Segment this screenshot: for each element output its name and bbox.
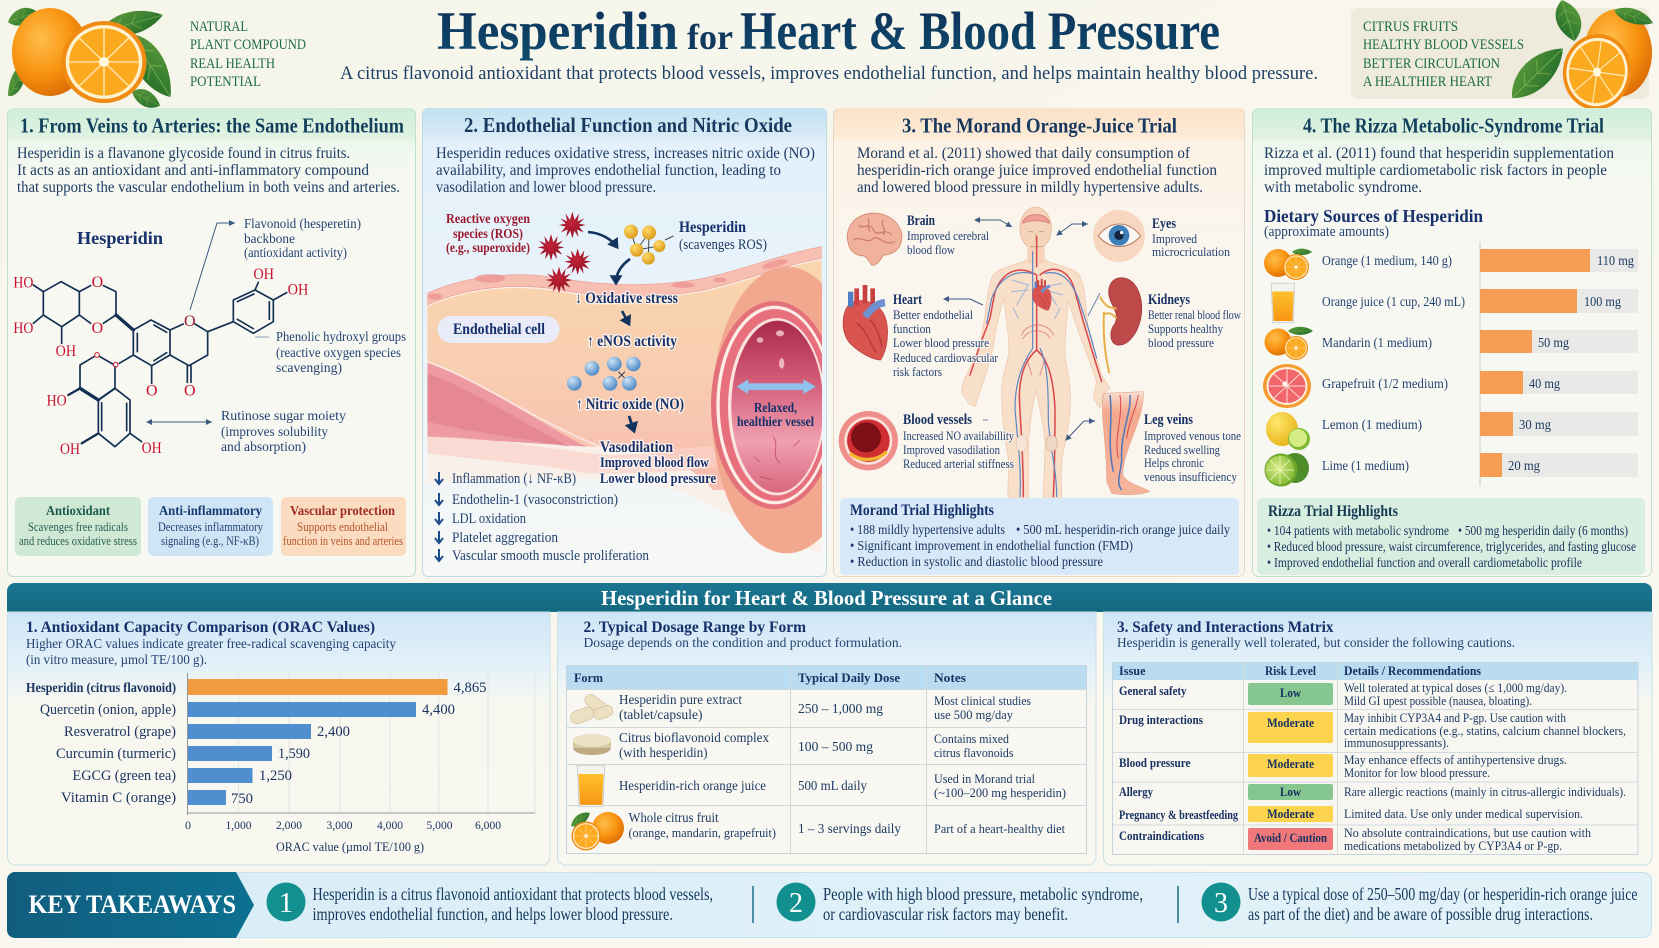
right banner words: [1363, 19, 1524, 90]
label: reactive oxygen species: (e.g., superoxide): [446, 240, 530, 255]
row: bioflavonoid complex: (with hesperidin): [619, 745, 708, 760]
callout: kidneys: [1088, 292, 1241, 350]
panel 3 intro text: [857, 145, 1217, 196]
badge: antioxidant: and reduces oxidative stress: [19, 533, 137, 548]
illustration: human body with circulatory system: [962, 207, 1110, 498]
Morand trial highlights: • 500 mL hesperidin-rich orange juice daily: [1016, 522, 1230, 537]
Morand trial highlights: • Significant improvement in endothelial function (FMD): [850, 538, 1133, 553]
flow label: nitric oxide: ↑ Nitric oxide (NO): [576, 396, 684, 413]
takeaway 1: improves endothelial function, and helps lower blood pressure.: [312, 904, 673, 924]
callout: eyes: Improved: [1152, 231, 1197, 246]
endothelial cell pill: Endothelial cell: [453, 321, 546, 338]
panel 1 intro text: [8, 140, 415, 200]
panel 3: Morand orange-juice trial: [834, 108, 1244, 576]
badge: anti-inflammatory: Anti-inflammatory: [159, 504, 262, 519]
callout: eyes: Eyes: [1152, 216, 1176, 232]
bar chart: ORAC values: [26, 673, 535, 854]
bar chart: ORAC values: 1,590: [278, 746, 310, 762]
table: dosage by form: Typical Daily Dose: [798, 670, 900, 685]
illustration: blood vessel wall: [427, 247, 862, 553]
safety heading: Hesperidin is generally well tolerated, but consider the following cautions.: [1117, 636, 1515, 651]
row: mandarin: Mandarin (1 medium): [1322, 336, 1432, 351]
chemical structure of hesperidin: O: [184, 313, 196, 330]
label: relaxed healthier vessel: Relaxed,: [754, 400, 797, 415]
icon: heart: [843, 285, 888, 360]
label: reactive oxygen species: Reactive oxygen: [446, 211, 530, 226]
dosage heading: 2. Typical Dosage Range by Form: [584, 619, 807, 636]
flow label: oxidative stress: ↓ Oxidative stress: [575, 290, 678, 307]
row: general safety: Well tolerated at typical doses (≤ 1,000 mg/day).: [1344, 681, 1567, 695]
Rizza trial highlights: Rizza Trial Highlights: [1268, 503, 1398, 520]
label: hesperidin scavenges ROS: (scavenges ROS): [679, 237, 767, 253]
title: [437, 1, 1220, 61]
row: contraindications: Avoid / Caution: [1254, 830, 1328, 845]
panel 2: endothelial function and nitric oxide: [422, 108, 862, 576]
flow label: vasodilation outcomes: Improved blood flow: [600, 455, 709, 471]
row: drug interactions: immunosuppressants).: [1344, 736, 1449, 750]
panel 2 intro text: Hesperidin reduces oxidative stress, increases nitric oxide (NO): [436, 145, 815, 162]
left banner words: [190, 19, 306, 90]
callout: brain: Improved cerebral: [907, 228, 989, 243]
callout: kidneys: Supports healthy: [1148, 321, 1223, 336]
row: whole citrus: Part of a heart-healthy diet: [934, 822, 1066, 836]
row: blood pressure: [1119, 753, 1567, 780]
list: reduced effects: Endothelin-1 (vasoconstriction): [452, 492, 618, 508]
row: drug interactions: Drug interactions: [1119, 713, 1203, 727]
panel 3 heading: 3. The Morand Orange-Juice Trial: [902, 114, 1177, 138]
row: lime: [1264, 453, 1638, 486]
bar chart: ORAC values: Resveratrol (grape): [64, 724, 176, 740]
ORAC heading: [26, 619, 396, 668]
row: contraindications: Contraindications: [1119, 829, 1204, 843]
label: hesperidin scavenges ROS: [679, 219, 767, 253]
row: pure extract: [569, 692, 1031, 726]
callout: heart: [893, 292, 999, 379]
callout: phenolic hydroxyl groups: Phenolic hydroxyl groups: [276, 330, 406, 345]
row: orange juice: Orange juice (1 cup, 240 mL): [1322, 295, 1465, 310]
icon: blood vessel cross-section: [839, 411, 898, 470]
row: bioflavonoid complex: Citrus bioflavonoid complex: [619, 730, 769, 745]
bar chart: ORAC values: 6,000: [475, 818, 501, 832]
panel 1 heading: [8, 108, 415, 140]
panel 1 intro text: that supports the vascular endothelium in both veins and arteries.: [17, 179, 400, 196]
row: lemon: Lemon (1 medium): [1322, 418, 1422, 433]
flow label: vasodilation outcomes: Vasodilation: [600, 439, 673, 456]
row: bioflavonoid complex: citrus flavonoids: [934, 746, 1014, 760]
bar chart: ORAC values: 5,000: [426, 818, 452, 832]
bar chart: ORAC values: EGCG (green tea): [72, 768, 176, 784]
panel 4 intro text: [1253, 140, 1651, 200]
row: whole citrus: (orange, mandarin, grapefruit): [628, 826, 776, 840]
takeaway 2: People with high blood pressure, metabolic syndrome,: [823, 884, 1143, 904]
row: bioflavonoid complex: [573, 730, 1014, 760]
icon: brain: [847, 213, 902, 265]
callout: leg veins: Helps chronic: [1144, 455, 1204, 470]
bar chart: ORAC values: 4,000: [377, 818, 403, 832]
row: pure extract: Most clinical studies: [934, 694, 1031, 708]
title: for: [687, 17, 733, 57]
row: general safety: [1119, 681, 1567, 708]
panel 2 heading: 2. Endothelial Function and Nitric Oxide: [464, 113, 792, 137]
row: whole citrus: [569, 808, 1066, 850]
bar chart: ORAC values: 4,865: [454, 680, 486, 696]
chemical structure of hesperidin: HO: [13, 320, 33, 337]
callout: brain: Brain: [907, 213, 935, 229]
row: allergy: Rare allergic reactions (mainly in citrus-allergic individuals).: [1344, 785, 1626, 799]
table: dosage by form: Form: [574, 670, 603, 685]
arrow: ROS to hesperidin: [588, 232, 617, 247]
panel 1: veins to arteries: [8, 108, 416, 576]
callout: blood vessels: [903, 412, 1014, 471]
takeaway 2: [776, 882, 1143, 924]
row: orange juice: Used in Morand trial: [934, 772, 1036, 786]
title: Hesperidin: [437, 1, 678, 61]
callout: heart: Better endothelial: [893, 307, 973, 322]
left banner words: NATURAL: [190, 19, 248, 35]
callout: blood vessels: Reduced arterial stiffness: [903, 456, 1014, 471]
row: pregnancy and breastfeeding: [1119, 806, 1583, 822]
bar chart: ORAC values: 1,250: [259, 768, 292, 784]
table: safety and interactions: [1112, 662, 1638, 854]
dietary sources heading: [1264, 206, 1483, 240]
callout: rutinose sugar moiety: Rutinose sugar moiety: [221, 409, 346, 424]
left banner words: PLANT COMPOUND: [190, 37, 306, 53]
callout: leg veins: [1066, 412, 1241, 484]
badge: anti-inflammatory: signaling (e.g., NF-κB): [161, 533, 259, 548]
row: grapefruit: [1263, 364, 1638, 408]
callout: leg veins: Leg veins: [1144, 412, 1193, 428]
row: pure extract: (tablet/capsule): [619, 707, 702, 722]
chemical structure of hesperidin: O: [184, 382, 196, 399]
row: lime: 20 mg: [1508, 459, 1540, 474]
callout: phenolic hydroxyl groups: (reactive oxygen species: [276, 346, 401, 361]
lower panel 3: safety matrix: [1104, 612, 1652, 865]
callout: phenolic hydroxyl groups: scavenging): [276, 361, 342, 376]
badge: vascular protection: function in veins and arteries: [283, 533, 403, 548]
chemical structure of hesperidin: OH: [56, 343, 76, 360]
table: dosage by form: [566, 666, 1086, 854]
Rizza trial highlights: • 104 patients with metabolic syndrome: [1267, 523, 1449, 538]
safety heading: 3. Safety and Interactions Matrix: [1117, 619, 1334, 636]
bar chart: ORAC values: Curcumin (turmeric): [56, 746, 176, 762]
header: title and citrus banners: [4, 0, 1656, 114]
row: blood pressure: Blood pressure: [1119, 756, 1191, 770]
callout: brain: [907, 213, 1012, 257]
takeaway 1: [266, 882, 713, 924]
callout: flavonoid backbone: (antioxidant activity): [244, 246, 347, 261]
takeaways tab: [7, 872, 254, 938]
at-a-glance banner: Hesperidin for Heart & Blood Pressure at a Glance: [601, 586, 1052, 610]
callout: kidneys: Better renal blood flow: [1148, 307, 1241, 322]
takeaway 1: Hesperidin is a citrus flavonoid antioxidant that protects blood vessels,: [312, 884, 713, 904]
row: drug interactions: certain medications (e.g., statins, calcium channel blockers,: [1344, 724, 1626, 738]
label: relaxed healthier vessel: [737, 400, 814, 429]
callout: heart: risk factors: [893, 364, 942, 379]
right banner words: BETTER CIRCULATION: [1363, 56, 1500, 72]
right banner box: [1351, 8, 1649, 99]
callout: leg veins: Improved venous tone: [1144, 428, 1241, 443]
row: mandarin: 50 mg: [1538, 336, 1569, 351]
flow label: eNOS activity: ↑ eNOS activity: [587, 333, 677, 350]
chemical structure of hesperidin: HO: [13, 275, 33, 292]
row: drug interactions: Moderate: [1267, 715, 1314, 730]
row: orange juice: 100 mg: [1584, 295, 1621, 310]
callout: leg veins: venous insufficiency: [1144, 469, 1237, 484]
chemical structure of hesperidin: O: [146, 382, 158, 399]
panel 4 intro text: improved multiple cardiometabolic risk factors in people: [1264, 162, 1607, 179]
row: orange juice: Hesperidin-rich orange juice: [619, 778, 766, 793]
badge: vascular protection: Vascular protection: [290, 504, 395, 519]
row: pure extract: 250 – 1,000 mg: [798, 702, 883, 717]
at-a-glance banner: [7, 583, 1652, 612]
dosage heading: Dosage depends on the condition and product formulation.: [584, 636, 902, 651]
row: whole citrus: 1 – 3 servings daily: [798, 822, 901, 837]
row: orange juice: [1271, 283, 1638, 323]
bar chart: ORAC values: Vitamin C (orange): [61, 790, 176, 806]
arrow: to eNOS: [622, 311, 629, 324]
panel 4 intro text: with metabolic syndrome.: [1264, 179, 1422, 196]
row: allergy: Allergy: [1119, 785, 1154, 799]
table: dosage by form: Notes: [934, 670, 966, 685]
callout: rutinose sugar moiety: (improves solubility: [221, 425, 328, 440]
icon: right oranges with leaves: [1501, 0, 1656, 114]
lower panel 2: dosage table: [558, 612, 1096, 865]
bar chart: ORAC values: 1,000: [226, 818, 252, 832]
row: pure extract: Hesperidin pure extract: [619, 692, 742, 707]
safety heading: [1117, 619, 1515, 651]
molecule label: Hesperidin: [77, 228, 163, 248]
panel 4 intro text: Rizza et al. (2011) found that hesperidin supplementation: [1264, 145, 1614, 162]
badge: antioxidant: [15, 497, 141, 556]
icon: kidney: [1100, 278, 1142, 373]
bar chart: dietary sources: [1263, 242, 1638, 486]
panel 1 heading: 1. From Veins to Arteries: the Same Endothelium: [20, 114, 404, 138]
row: general safety: Mild GI upest possible (nausea, bloating).: [1344, 694, 1532, 708]
row: contraindications: medications metabolized by CYP3A4 or P-gp.: [1344, 839, 1562, 853]
icon: leg veins: [1102, 392, 1150, 495]
flow label: vasodilation outcomes: Lower blood pressure: [600, 471, 716, 487]
callout: rutinose sugar moiety: and absorption): [221, 440, 306, 455]
key takeaways band: [7, 872, 1652, 938]
callout: eyes: [1057, 216, 1230, 259]
panel 2 intro text: vasodilation and lower blood pressure.: [436, 179, 656, 196]
panel 1 intro text: Hesperidin is a flavanone glycoside found in citrus fruits.: [17, 145, 350, 162]
callout: flavonoid backbone: Flavonoid (hesperetin): [244, 217, 361, 232]
ORAC heading: 1. Antioxidant Capacity Comparison (ORAC Values): [26, 619, 375, 636]
panel 4 heading: [1253, 108, 1651, 140]
row: pregnancy and breastfeeding: Limited data. Use only under medical supervision.: [1344, 807, 1583, 821]
row: bioflavonoid complex: 100 – 500 mg: [798, 740, 873, 755]
row: orange juice: 500 mL daily: [798, 779, 867, 794]
row: allergy: Low: [1280, 784, 1302, 799]
label: reactive oxygen species: [446, 211, 530, 255]
list: reduced effects: Inflammation (↓ NF-κB): [452, 471, 576, 487]
callout: kidneys: Kidneys: [1148, 292, 1190, 308]
right banner words: CITRUS FRUITS: [1363, 19, 1458, 35]
takeaway 2: 2: [789, 888, 803, 919]
title: Heart & Blood Pressure: [740, 1, 1220, 61]
icon: eye: [1093, 210, 1145, 262]
chemical structure of hesperidin: OH: [288, 282, 309, 299]
dietary sources heading: Dietary Sources of Hesperidin: [1264, 206, 1483, 226]
callout: heart: function: [893, 321, 931, 336]
icon: left oranges with leaves: [4, 4, 182, 113]
table: safety and interactions: Details / Recommendations: [1344, 664, 1481, 678]
row: lemon: [1266, 412, 1638, 450]
panel 3 heading: [834, 108, 1244, 140]
callout: leg veins: Reduced swelling: [1144, 442, 1220, 457]
Rizza trial highlights: • Improved endothelial function and overall cardiometabolic profile: [1267, 555, 1582, 570]
row: pregnancy and breastfeeding: Pregnancy & breastfeeding: [1119, 808, 1239, 822]
panel 3 intro text: hesperidin-rich orange juice improved endothelial function: [857, 162, 1217, 179]
panel 2 intro text: [436, 145, 815, 196]
callout: eyes: microcriculation: [1152, 244, 1230, 259]
row: orange: [1264, 249, 1638, 280]
takeaway 3: 3: [1214, 888, 1228, 919]
callout: heart: Lower blood pressure: [893, 335, 989, 350]
takeaway 2: or cardiovascular risk factors may benefit.: [823, 904, 1068, 924]
row: general safety: Low: [1280, 685, 1302, 700]
takeaways tab: KEY TAKEAWAYS: [28, 890, 236, 919]
row: allergy: [1119, 784, 1626, 800]
panel 3 intro text: and lowered blood pressure in mildly hypertensive adults.: [857, 179, 1203, 196]
callout: phenolic hydroxyl groups: [255, 330, 406, 376]
row: orange juice: (~100–200 mg hesperidin): [934, 786, 1066, 800]
panel 1 intro text: It acts as an antioxidant and anti-inflammatory compound: [17, 162, 369, 179]
row: contraindications: No absolute contraindications, but use caution with: [1344, 826, 1592, 840]
row: lime: Lime (1 medium): [1322, 459, 1409, 474]
row: general safety: General safety: [1119, 684, 1187, 698]
badge: vascular protection: Supports endothelial: [297, 519, 388, 534]
right banner words: HEALTHY BLOOD VESSELS: [1363, 37, 1524, 53]
row: pregnancy and breastfeeding: Moderate: [1267, 806, 1314, 821]
callout: rutinose sugar moiety: [147, 409, 346, 455]
row: blood pressure: May enhance effects of antihypertensive drugs.: [1344, 753, 1567, 767]
Morand trial highlights: • Reduction in systolic and diastolic blood pressure: [850, 554, 1103, 569]
arrow: hesperidin to oxidative stress: [616, 259, 630, 283]
subtitle: A citrus flavonoid antioxidant that protects blood vessels, improves endothelial function, and helps maintain healthy blood pressure.: [340, 63, 1318, 84]
ORAC heading: (in vitro measure, µmol TE/100 g).: [26, 653, 207, 668]
dietary sources heading: (approximate amounts): [1264, 224, 1389, 240]
Morand trial highlights: Morand Trial Highlights: [850, 502, 994, 519]
bar chart: ORAC values: 2,400: [317, 724, 350, 740]
lower panel 1: ORAC comparison: [8, 612, 550, 865]
bar chart: ORAC values: Hesperidin (citrus flavonoid): [26, 681, 176, 696]
panel 4: Rizza metabolic-syndrome trial: [1252, 108, 1652, 576]
bar chart: ORAC values: 0: [185, 818, 191, 832]
table: safety and interactions: Risk Level: [1265, 664, 1316, 678]
row: orange: Orange (1 medium, 140 g): [1322, 254, 1452, 269]
chemical structure of hesperidin: O: [92, 274, 103, 291]
row: grapefruit: Grapefruit (1/2 medium): [1322, 377, 1448, 392]
callout: flavonoid backbone: [190, 217, 361, 310]
callout: blood vessels: Blood vessels: [903, 412, 972, 428]
Rizza trial highlights: [1257, 498, 1645, 575]
callout: blood vessels: Improved vasodilation: [903, 442, 1000, 457]
left banner words: REAL HEALTH: [190, 56, 275, 72]
row: bioflavonoid complex: Contains mixed: [934, 732, 1010, 746]
chemical structure of hesperidin: OH: [142, 440, 162, 457]
callout: blood vessels: Increased NO availabillity: [903, 428, 1014, 443]
chemical structure of hesperidin: OH: [60, 441, 80, 458]
bar chart: ORAC values: Quercetin (onion, apple): [40, 702, 176, 718]
icon: nitric oxide molecules: [567, 357, 641, 391]
list: reduced effects: Platelet aggregation: [452, 530, 559, 546]
endothelial cell pill: [438, 316, 560, 343]
bar chart: ORAC values: 3,000: [326, 818, 352, 832]
callout: heart: Heart: [893, 292, 922, 308]
panel 3 intro text: Morand et al. (2011) showed that daily consumption of: [857, 145, 1191, 162]
takeaway 3: [1202, 882, 1638, 924]
icon: hesperidin molecules: [624, 225, 673, 265]
chemical structure of hesperidin: [13, 266, 309, 458]
row: blood pressure: Moderate: [1267, 756, 1314, 771]
row: drug interactions: May inhibit CYP3A4 and P-gp. Use caution with: [1344, 711, 1567, 725]
left banner words: POTENTIAL: [190, 74, 261, 90]
badge: vascular protection: [281, 497, 406, 556]
list: reduced effects: LDL oxidation: [452, 511, 527, 527]
flow label: vasodilation outcomes: [600, 439, 716, 487]
label: relaxed healthier vessel: healthier vessel: [737, 414, 814, 429]
badge: antioxidant: Scavenges free radicals: [28, 519, 128, 534]
row: orange juice: [577, 765, 1066, 807]
row: drug interactions: [1119, 711, 1626, 750]
right banner words: A HEALTHIER HEART: [1363, 74, 1492, 90]
panel 2 heading: [423, 108, 826, 140]
chemical structure of hesperidin: O: [92, 320, 103, 337]
table: safety and interactions: Issue: [1119, 664, 1146, 678]
row: whole citrus: Whole citrus fruit: [628, 810, 719, 825]
row: pure extract: use 500 mg/day: [934, 708, 1014, 722]
bar chart: ORAC values: 4,400: [422, 702, 455, 718]
row: contraindications: [1119, 826, 1592, 853]
badge: antioxidant: Antioxidant: [46, 504, 110, 519]
label: reactive oxygen species: species (ROS): [453, 226, 523, 241]
callout: flavonoid backbone: backbone: [244, 232, 295, 247]
row: lemon: 30 mg: [1519, 418, 1551, 433]
takeaway 1: 1: [279, 888, 293, 919]
label: hesperidin scavenges ROS: Hesperidin: [679, 219, 746, 236]
callout: kidneys: blood pressure: [1148, 335, 1214, 350]
row: grapefruit: 40 mg: [1529, 377, 1560, 392]
bar chart: ORAC values: 2,000: [276, 818, 302, 832]
callout: heart: Reduced cardiovascular: [893, 350, 999, 365]
panel 2 intro text: availability, and improves endothelial function, leading to: [436, 162, 781, 179]
arrow: to vasodilation: [629, 416, 634, 431]
badge: anti-inflammatory: [148, 497, 273, 556]
Morand trial highlights: [840, 498, 1239, 575]
icon: reactive oxygen star particles: [538, 212, 591, 293]
list: reduced effects: [435, 471, 650, 564]
Morand trial highlights: • 188 mildly hypertensive adults: [850, 522, 1005, 537]
panel 4 heading: 4. The Rizza Metabolic-Syndrome Trial: [1303, 114, 1604, 138]
chemical structure of hesperidin: OH: [253, 266, 274, 283]
list: reduced effects: Vascular smooth muscle proliferation: [452, 548, 650, 564]
callout: brain: blood flow: [907, 242, 956, 257]
bar chart: ORAC values: 750: [231, 791, 253, 807]
row: mandarin: [1264, 327, 1638, 360]
Rizza trial highlights: • 500 mg hesperidin daily (6 months): [1458, 523, 1628, 538]
row: blood pressure: Monitor for low blood pressure.: [1344, 766, 1490, 780]
badge: anti-inflammatory: Decreases inflammatory: [158, 519, 263, 534]
ORAC heading: Higher ORAC values indicate greater free-radical scavenging capacity: [26, 637, 396, 652]
chemical structure of hesperidin: HO: [47, 392, 67, 409]
bar chart: ORAC values: ORAC value (µmol TE/100 g): [276, 839, 424, 854]
dosage heading: [584, 619, 902, 651]
row: orange: 110 mg: [1597, 254, 1634, 269]
